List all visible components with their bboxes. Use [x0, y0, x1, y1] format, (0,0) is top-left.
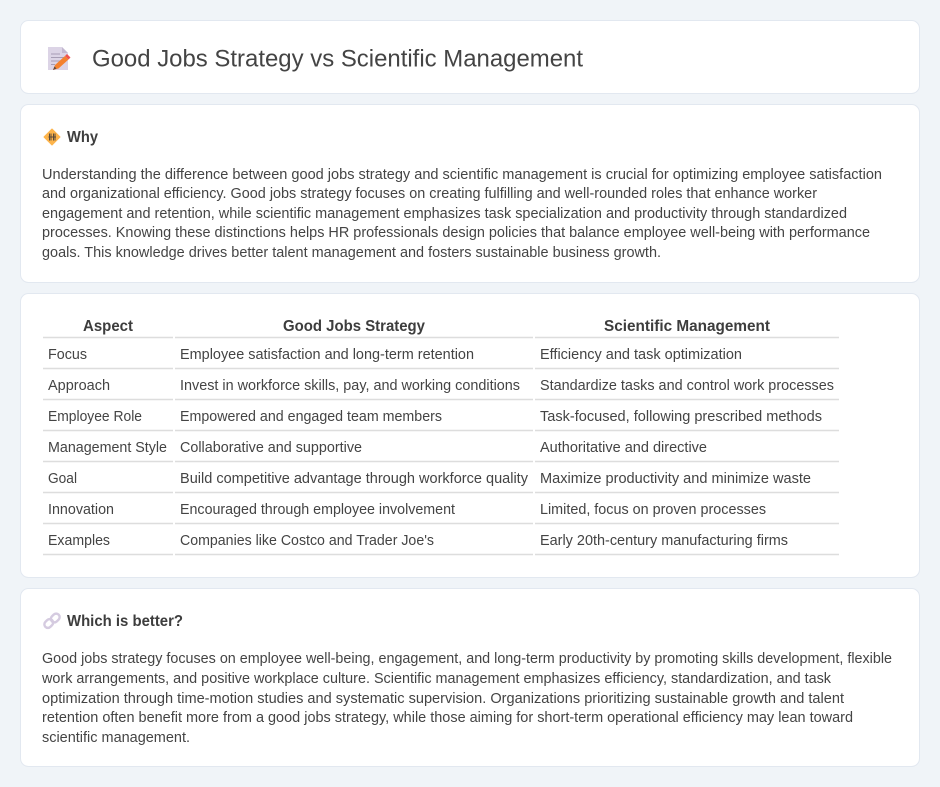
row: management style: Authoritative and directive	[540, 440, 707, 456]
text block: which is better: scientific management.	[42, 730, 190, 746]
row: approach: Approach	[48, 378, 110, 394]
text block: why: Understanding the difference between good jobs strategy and scientific management is crucial for optimizing employee satisfaction	[42, 167, 882, 183]
table header	[83, 318, 771, 335]
panel: comparison table	[20, 294, 920, 578]
text block: which is better: optimization through time-motion studies and systematic supervision. Organizations prioritizing sustainable growth and talent	[42, 691, 844, 707]
row: employee role: Employee Role	[48, 409, 142, 425]
row: examples: Examples	[48, 533, 110, 549]
icon: link	[43, 612, 61, 629]
table rules	[43, 338, 839, 554]
row: management style: Collaborative and supportive	[180, 440, 362, 456]
panel: which is better	[20, 588, 920, 766]
table header: Good Jobs Strategy	[283, 318, 425, 335]
row: goal: Build competitive advantage through workforce quality	[180, 471, 529, 487]
row: examples: Companies like Costco and Trader Joe's	[180, 533, 434, 549]
text block: why: processes. Knowing these distinctions helps HR professionals design policies that balance employee well-being with performance	[42, 225, 870, 241]
table header: Scientific Management	[604, 318, 771, 335]
text block: which is better: retention often benefit more from a good jobs strategy, while those aiming for short-term operational efficiency may lean toward	[42, 710, 853, 726]
row: focus: Employee satisfaction and long-term retention	[180, 347, 474, 363]
row: management style	[48, 440, 707, 456]
row: goal: Goal	[48, 471, 77, 487]
text block: which is better: work arrangements, and positive workplace culture. Scientific management emphasizes efficiency, standardization, and task	[41, 671, 832, 687]
icon: document with pencil	[48, 47, 70, 70]
row: focus: Efficiency and task optimization	[540, 347, 742, 363]
text block: why: and organizational efficiency. Good jobs strategy focuses on creating fulfilling and well-rounded roles that enhance worker	[42, 186, 817, 202]
text block: which is better	[41, 651, 892, 746]
row: focus	[48, 347, 742, 363]
table header: Aspect	[83, 318, 134, 335]
row: goal	[48, 471, 811, 487]
row: examples	[48, 533, 788, 549]
row: focus: Focus	[48, 347, 87, 363]
row: employee role: Empowered and engaged team members	[180, 409, 442, 425]
row: employee role: Task-focused, following prescribed methods	[540, 409, 822, 425]
row: employee role	[48, 409, 822, 425]
row: innovation	[48, 502, 766, 518]
heading: which is better: Which is better?	[67, 613, 183, 630]
panel: why	[20, 104, 920, 282]
row: innovation: Limited, focus on proven processes	[540, 502, 766, 518]
row: innovation: Encouraged through employee involvement	[180, 502, 455, 518]
text block: why: engagement and retention, while scientific management emphasizes task specialization and productivity through standardized	[42, 206, 847, 222]
heading: why: Why	[67, 129, 98, 146]
text block: why	[42, 167, 882, 261]
row: innovation: Innovation	[48, 502, 114, 518]
row: examples: Early 20th-century manufacturing firms	[540, 533, 788, 549]
row: approach: Invest in workforce skills, pay, and working conditions	[180, 378, 520, 394]
text block: which is better: Good jobs strategy focuses on employee well-being, engagement, and long-term productivity by promoting skills development, flexible	[42, 651, 892, 667]
row: management style: Management Style	[48, 440, 167, 456]
panel: title card	[20, 20, 920, 94]
title: Good Jobs Strategy vs Scientific Management	[92, 46, 583, 72]
row: approach: Standardize tasks and control work processes	[540, 378, 834, 394]
text block: why: goals. This knowledge drives better talent management and fosters sustainable business growth.	[42, 245, 661, 261]
row: approach	[48, 378, 834, 394]
row: goal: Maximize productivity and minimize waste	[540, 471, 811, 487]
icon: warning diamond	[44, 129, 60, 145]
